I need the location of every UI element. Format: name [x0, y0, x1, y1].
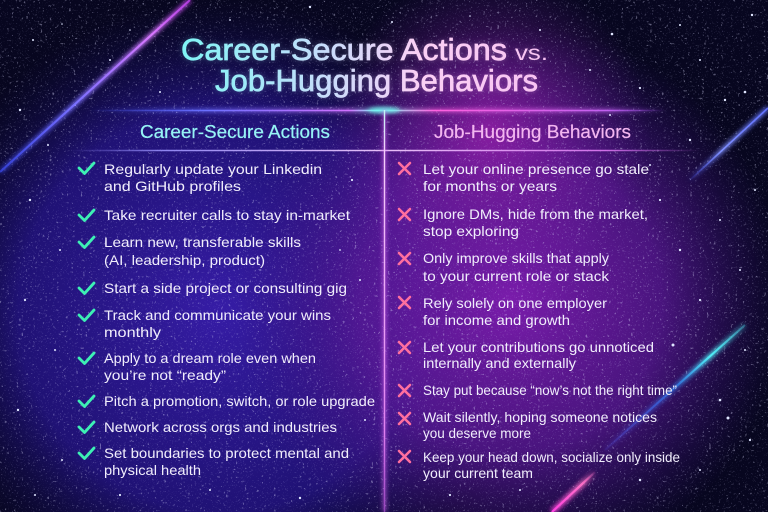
shooting star: bottom magenta [552, 472, 595, 512]
item: ignore DMs: stop exploring [423, 223, 519, 239]
item: learn skills: (AI, leadership, product) [104, 252, 265, 268]
item: wait silently: Wait silently, hoping someone notices [423, 409, 657, 425]
item: only current skills: Only improve skills that apply [423, 250, 609, 266]
item: update profiles: Regularly update your Linkedin [104, 161, 322, 177]
item: unnoticed contributions [399, 339, 654, 371]
panel: job-hugging behaviors list [399, 161, 680, 481]
item: pitch promotion: Pitch a promotion, switch, or role upgrade [104, 393, 375, 409]
item: boundaries [79, 445, 349, 478]
item: dream role: Apply to a dream role even when [104, 350, 316, 366]
item: one employer [399, 295, 607, 328]
title: Job-Hugging Behaviors [215, 63, 538, 98]
item: ignore DMs: Ignore DMs, hide from the market, [423, 206, 648, 222]
title: Career-Secure Actions [181, 32, 507, 67]
item: update profiles [79, 161, 322, 194]
panel: career-secure actions list [79, 161, 375, 478]
item: online presence: Let your online presence go stale [423, 161, 649, 177]
shooting star: right blue [690, 108, 768, 180]
shooting star: top left [0, 0, 190, 172]
item: track wins: monthly [104, 324, 161, 340]
shooting star: right cyan [605, 325, 745, 450]
title [181, 32, 548, 98]
item: ignore DMs [399, 206, 648, 239]
item: recruiter calls: Take recruiter calls to stay in-market [104, 207, 350, 223]
column heading: Job-Hugging Behaviors: Job-Hugging Behaviors [434, 122, 631, 142]
item: one employer: Rely solely on one employer [423, 295, 607, 311]
item: online presence [399, 161, 649, 194]
item: head down: your current team [423, 465, 533, 481]
item: wait silently: you deserve more [423, 425, 531, 441]
item: learn skills [79, 234, 301, 268]
item: side project: Start a side project or consulting gig [104, 280, 347, 296]
item: stay put: Stay put because “now’s not the right time” [423, 382, 677, 398]
item: only current skills [399, 250, 610, 284]
item: only current skills: to your current role or stack [423, 268, 610, 284]
title: vs. [515, 42, 548, 65]
item: learn skills: Learn new, transferable skills [104, 234, 301, 250]
item: update profiles: and GitHub profiles [104, 178, 241, 194]
item: track wins [79, 307, 331, 340]
item: dream role: you’re not “ready” [104, 367, 226, 383]
item: unnoticed contributions: internally and externally [423, 355, 576, 371]
table dividers [70, 107, 700, 512]
item: network: Network across orgs and industries [104, 419, 337, 435]
item: online presence: for months or years [423, 178, 557, 194]
item: dream role [79, 350, 316, 383]
item: head down: Keep your head down, socialize only inside [423, 449, 680, 465]
item: boundaries: Set boundaries to protect mental and [104, 445, 349, 461]
item: head down [399, 449, 680, 481]
item: track wins: Track and communicate your wins [104, 307, 331, 323]
item: unnoticed contributions: Let your contributions go unnoticed [423, 339, 654, 355]
item: one employer: for income and growth [423, 312, 570, 328]
column heading: Career-Secure Actions: Career-Secure Actions [140, 122, 330, 142]
item: wait silently [399, 409, 657, 441]
item: boundaries: physical health [104, 462, 201, 478]
